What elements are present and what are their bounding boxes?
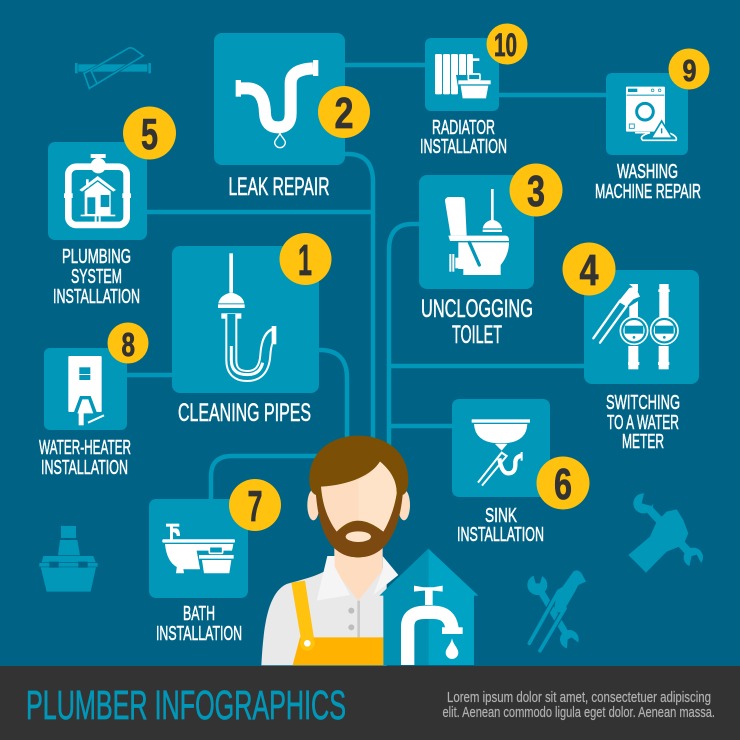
icon: leaking pipe <box>236 60 318 148</box>
badge: 4 <box>562 242 616 296</box>
panel: 5 plumbing system installation <box>48 106 176 308</box>
label: bath installation <box>156 602 242 645</box>
label: radiator installation: RADIATOR <box>432 116 495 139</box>
collar <box>317 556 398 601</box>
label: bath installation: BATH <box>183 602 215 625</box>
label: sink installation: SINK <box>485 504 517 527</box>
icon: toolbox with hand <box>39 526 98 592</box>
label: washing machine repair: WASHING <box>617 160 678 183</box>
label: water-heater installation: INSTALLATION <box>41 456 128 479</box>
panel: 4 switching to a water meter <box>562 242 699 453</box>
icon: radiator and toolbox <box>435 54 493 100</box>
badge: 8 <box>108 322 148 364</box>
badge: 7 <box>229 479 281 531</box>
card: bath <box>149 499 248 598</box>
label: switching to a water meter: SWITCHING <box>606 391 680 414</box>
neck <box>334 543 383 601</box>
label: unclogging toilet <box>421 295 533 349</box>
icon: bathtub and toolbox <box>162 524 236 576</box>
label: water-heater installation: WATER-HEATER <box>39 436 131 459</box>
card: radiator <box>425 38 499 111</box>
label: sink installation <box>457 504 544 546</box>
panel: 10 radiator installation <box>420 24 528 158</box>
badge: 3 <box>510 164 562 216</box>
badge: 8: 8 <box>122 326 135 363</box>
card: washing machine <box>606 73 688 155</box>
panel: 3 unclogging toilet <box>419 164 562 349</box>
label: switching to a water meter: TO A WATER <box>607 411 679 434</box>
card: plumbing system <box>48 142 147 240</box>
card: toilet <box>419 175 534 289</box>
badge: 9: 9 <box>682 53 696 88</box>
badge: 5: 5 <box>141 110 158 159</box>
panel: 1 cleaning pipes <box>172 233 332 427</box>
label: plumbing system installation: INSTALLATION <box>53 285 140 308</box>
card: water heater <box>44 348 127 430</box>
card: sink <box>452 399 550 497</box>
label: cleaning pipes: CLEANING PIPES <box>178 399 311 427</box>
label: plumbing system installation <box>53 245 140 308</box>
panel: 2 leak repair <box>214 33 370 201</box>
icon: house with pipes <box>64 154 131 225</box>
footer title: PLUMBER INFOGRAPHICS <box>26 682 346 728</box>
badge: 6: 6 <box>554 460 572 509</box>
label: sink installation: INSTALLATION <box>457 523 544 546</box>
label: bath installation: INSTALLATION <box>156 622 242 645</box>
badge: 9 <box>668 48 710 90</box>
icon: hand holding wrench <box>628 489 704 573</box>
icon: wrench and two water meters <box>593 284 678 369</box>
badge: 2 <box>318 86 370 138</box>
card: leak repair <box>214 33 345 165</box>
card: cleaning pipes <box>172 246 319 393</box>
badge: 1 <box>280 233 332 285</box>
plumber figure <box>261 436 410 665</box>
label: switching to a water meter <box>606 391 680 453</box>
label: radiator installation <box>420 116 507 158</box>
overalls <box>291 581 383 665</box>
badge: 3: 3 <box>527 167 545 216</box>
icon: plunger and trap <box>218 253 277 376</box>
badge: 4: 4 <box>580 246 599 295</box>
footer bar <box>0 666 740 740</box>
mouth <box>346 531 371 542</box>
label: unclogging toilet: UNCLOGGING <box>421 295 533 323</box>
label: switching to a water meter: METER <box>622 430 664 453</box>
icon: house with faucet <box>379 549 478 665</box>
shirt <box>261 568 387 665</box>
shirt placket and buttons <box>348 601 360 637</box>
label: plumbing system installation: SYSTEM <box>71 265 122 288</box>
badge: 7: 7 <box>248 482 262 531</box>
icon: toilet and plunger <box>445 189 509 275</box>
icon: sink and wrench <box>472 419 530 486</box>
label: plumbing system installation: PLUMBING <box>62 245 131 268</box>
icon: hacksaw and pipe <box>75 48 151 88</box>
connector pipes <box>127 65 606 499</box>
badge: 2: 2 <box>334 89 354 138</box>
face <box>321 462 397 532</box>
panel: 7 bath installation <box>149 479 281 645</box>
card: water meter <box>584 270 699 384</box>
icon: crossed wrenches <box>527 570 586 653</box>
face highlight <box>358 462 397 532</box>
badge: 6 <box>536 456 590 510</box>
badge: 5 <box>123 106 176 160</box>
label: washing machine repair <box>595 160 701 203</box>
icon: water heater <box>68 356 104 425</box>
badge: 1: 1 <box>298 236 312 285</box>
label: radiator installation: INSTALLATION <box>420 135 507 158</box>
icon: washing machine with warning <box>626 87 676 140</box>
panel: 8 water-heater installation <box>39 322 148 479</box>
panel: 6 sink installation <box>452 399 590 546</box>
label: leak repair: LEAK REPAIR <box>228 173 330 201</box>
beard shade <box>316 492 402 557</box>
hair and beard <box>309 436 408 557</box>
label: water-heater installation <box>39 436 131 479</box>
label: unclogging toilet: TOILET <box>452 321 502 349</box>
footer description <box>442 689 715 721</box>
ears <box>307 490 410 520</box>
badge: 10: 10 <box>494 27 517 63</box>
panel: 9 washing machine repair <box>595 48 710 203</box>
